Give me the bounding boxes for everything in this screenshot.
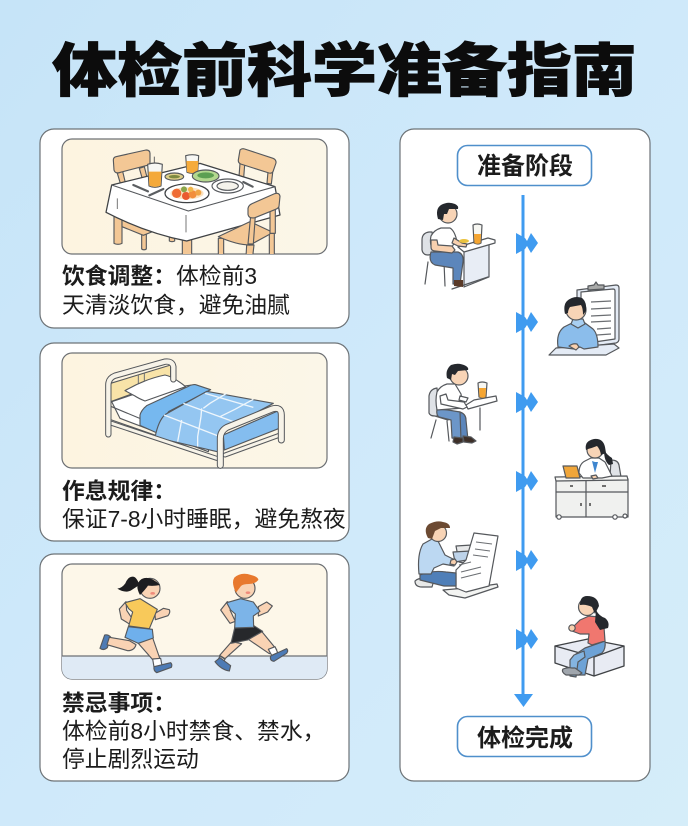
title: 体检前科学准备指南: [52, 24, 637, 108]
illustration: dining table: [62, 139, 327, 257]
icon: person eating at desk: [422, 203, 495, 289]
text: diet: 天清淡饮食，避免油腻: [62, 292, 290, 318]
heading: preparation stage: [458, 146, 592, 186]
text: rest: [62, 478, 346, 532]
heading: preparation stage: 准备阶段: [477, 152, 573, 180]
text: diet: [62, 263, 290, 318]
text: diet: 饮食调整：: [62, 263, 176, 289]
text: prohibitions: 禁忌事项：: [62, 690, 176, 716]
girl runner: [100, 577, 172, 673]
panel: prohibitions: [40, 554, 349, 781]
text: prohibitions: [62, 690, 325, 772]
icon: person with report: [415, 521, 498, 598]
panel: rest: [40, 343, 349, 541]
panel: diet: [40, 129, 349, 328]
text: prohibitions: 停止剧烈运动: [62, 746, 199, 772]
step arrows: [516, 233, 538, 650]
heading: exam complete: 体检完成: [477, 724, 573, 752]
heading: exam complete: [458, 716, 592, 756]
illustration: bed: [62, 353, 327, 468]
panel: timeline: [400, 129, 650, 781]
text: rest: 保证7-8小时睡眠，避免熬夜: [62, 506, 346, 532]
text: diet: 体检前3: [176, 263, 257, 289]
boy runner: [215, 574, 288, 671]
icon: person sitting on bench: [555, 596, 624, 677]
text: prohibitions: 体检前8小时禁食、禁水，: [62, 718, 325, 744]
icon: doctor at desk: [555, 439, 628, 519]
icon: person seated with drink: [429, 364, 497, 444]
icon: person with clipboard: [549, 282, 619, 355]
illustration: runners: [62, 564, 327, 680]
text: rest: 作息规律：: [62, 478, 176, 504]
timeline arrow: [514, 195, 533, 707]
